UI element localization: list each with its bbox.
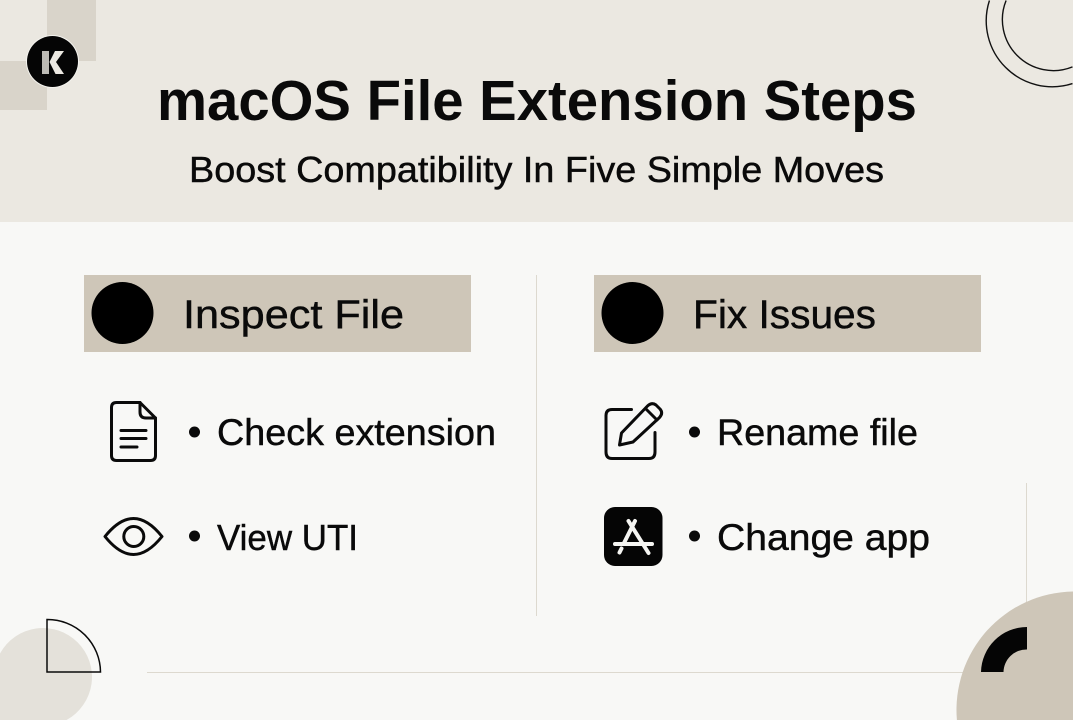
- icon: app store: [604, 507, 662, 566]
- heading: fix issues: Fix Issues: [693, 293, 876, 337]
- list item: view uti: View UTI: [217, 517, 358, 558]
- decoration: bottom-right circle and black arc: [956, 592, 1073, 720]
- center divider: [536, 275, 537, 616]
- icon: document: [112, 402, 156, 460]
- decoration: bottom-left circle and quarter outline: [0, 619, 100, 720]
- heading: inspect file: Inspect File: [183, 293, 404, 337]
- subtitle: Boost Compatibility In Five Simple Moves: [189, 149, 884, 190]
- heading: inspect file: [84, 275, 471, 352]
- list item: rename file: Rename file: [717, 412, 918, 453]
- bottom decorative lines: [147, 483, 1027, 673]
- panel: inspect file: [84, 275, 496, 558]
- panel: fix issues: [594, 275, 981, 566]
- heading: fix issues: [594, 275, 981, 352]
- header panel: [0, 0, 1073, 222]
- icon: eye: [105, 518, 162, 554]
- icon: edit pencil: [606, 404, 662, 458]
- list item: check extension: Check extension: [217, 412, 496, 453]
- title: macOS File Extension Steps: [157, 69, 917, 133]
- list item: change app: Change app: [717, 517, 930, 558]
- icon: K logo: [26, 35, 79, 88]
